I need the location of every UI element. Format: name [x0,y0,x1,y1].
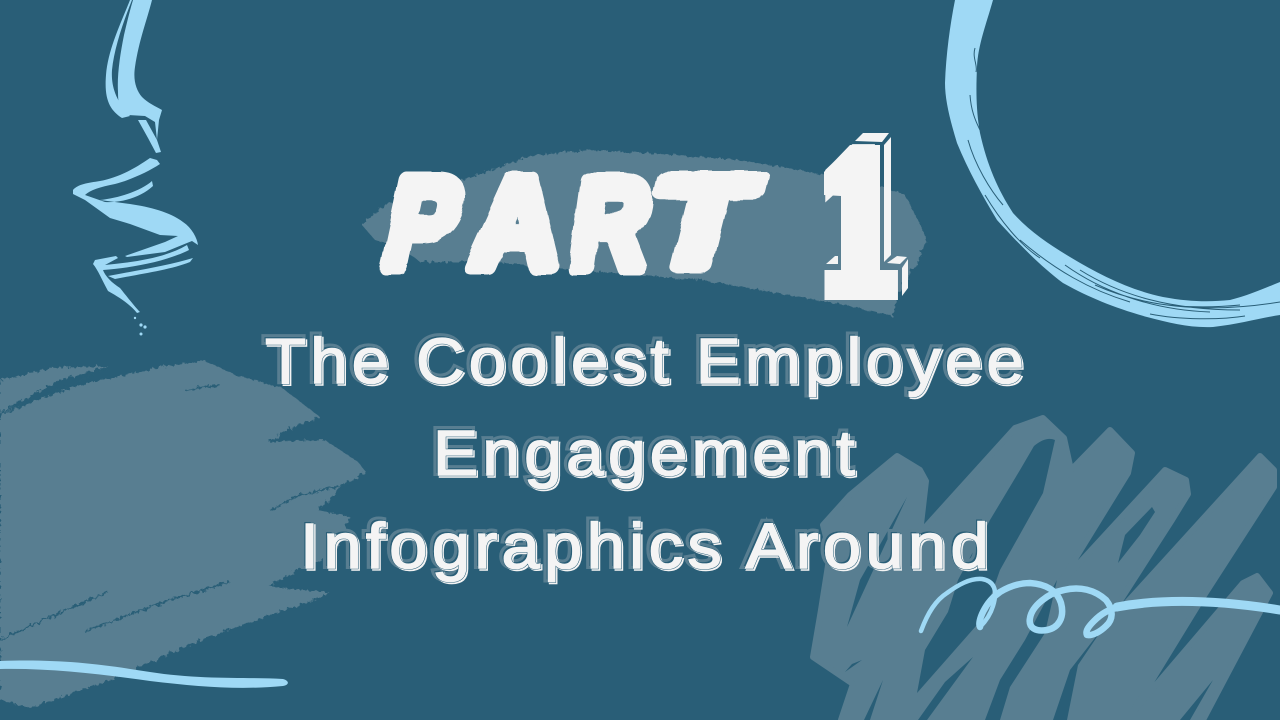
circle brush: top right [945,0,1280,327]
brush: bottom left [0,361,366,708]
squiggle brush: top left [73,0,198,336]
word: part: A [465,152,568,295]
word: part: R [563,154,659,296]
brush: behind part heading [362,150,926,316]
subtitle shadow layer [266,326,1030,584]
subtitle outline layer: Infographics Around [298,508,991,580]
heading: part 1 [373,102,908,342]
word: part: P [373,152,473,295]
word: part [373,150,769,296]
subtitle fill layer [265,325,1028,582]
heading: subtitle [263,323,1030,584]
numeral: 1: 1 [818,102,899,342]
subtitle fill layer: Infographics Around [300,510,993,582]
subtitle gap layer: The Coolest Employee [265,325,1028,397]
subtitle gap layer: Infographics Around [300,510,993,582]
subtitle shadow layer: The Coolest Employee [266,326,1030,398]
curl line: bottom right [921,579,1280,635]
subtitle outline layer: The Coolest Employee [263,323,1026,395]
subtitle fill layer: The Coolest Employee [265,325,1028,397]
subtitle fill layer: Engagement [433,417,859,489]
subtitle gap layer: Engagement [433,417,859,489]
subtitle shadow layer: Engagement [434,418,860,490]
subtitle outline layer: Engagement [431,415,857,487]
stroke: bottom left line [0,661,288,688]
subtitle shadow layer: Infographics Around [302,512,994,584]
subtitle gap layer [265,325,1028,582]
scribble: bottom right [813,418,1274,720]
word: part: T [635,150,769,294]
subtitle outline layer [263,323,1026,580]
